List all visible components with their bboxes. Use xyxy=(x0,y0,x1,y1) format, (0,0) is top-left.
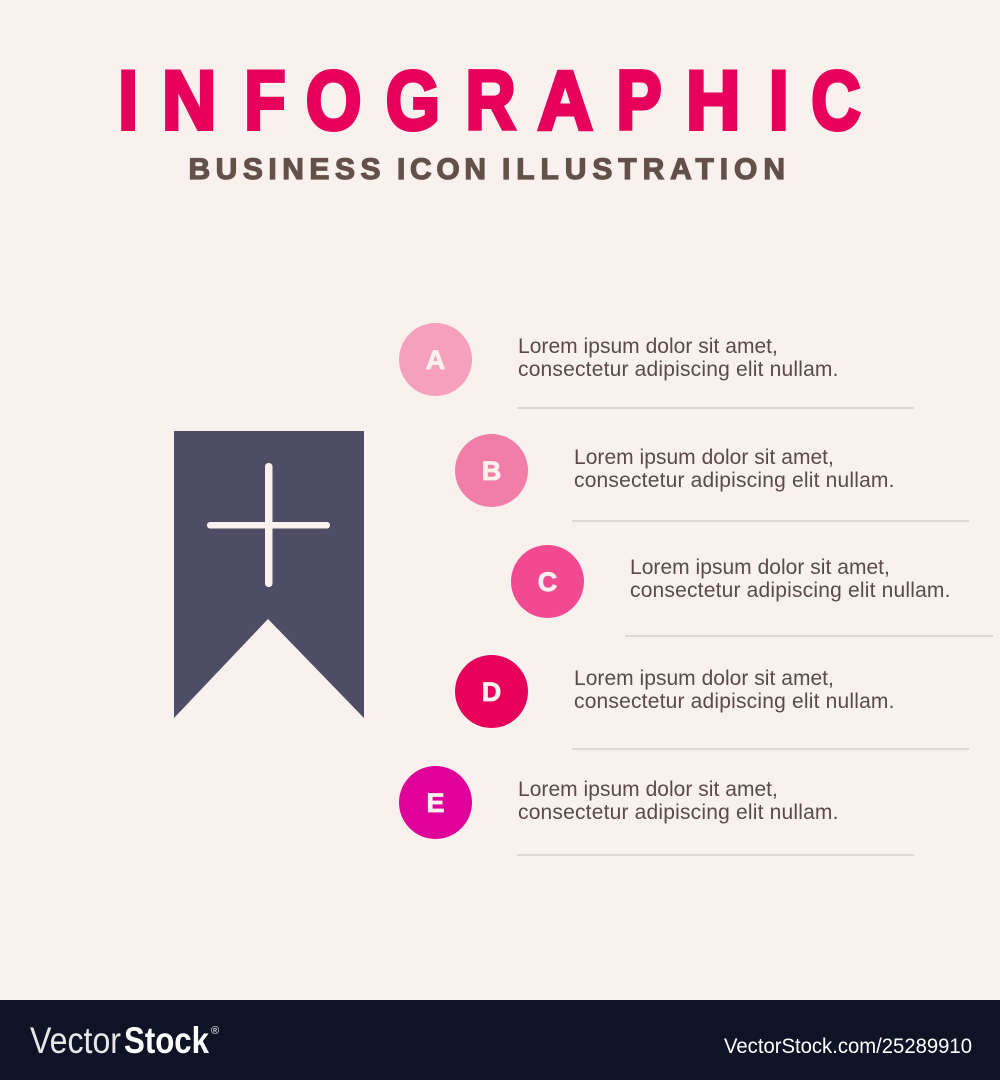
item E xyxy=(399,766,914,856)
footer logo: Stock xyxy=(124,1020,209,1061)
text B xyxy=(574,446,895,492)
subtitle: ICON xyxy=(397,153,486,186)
title: A xyxy=(538,53,593,147)
badge A: A xyxy=(426,345,445,375)
badge B: B xyxy=(482,456,501,486)
title: N xyxy=(162,53,216,147)
badge C xyxy=(511,545,584,618)
footer bar xyxy=(0,1000,1000,1080)
footer url: VectorStock.com/25289910 xyxy=(724,1035,972,1058)
subtitle xyxy=(188,153,785,186)
text D xyxy=(574,667,895,713)
text A xyxy=(518,335,839,381)
text E: Lorem ipsum dolor sit amet, xyxy=(518,778,778,801)
item C xyxy=(511,545,993,637)
badge B xyxy=(455,434,528,507)
title: R xyxy=(465,53,516,147)
text A: consectetur adipiscing elit nullam. xyxy=(518,358,839,381)
text B: Lorem ipsum dolor sit amet, xyxy=(574,446,834,469)
icon: bookmark with plus xyxy=(174,431,364,718)
title xyxy=(118,53,861,147)
text D: consectetur adipiscing elit nullam. xyxy=(574,690,895,713)
title: G xyxy=(386,53,440,147)
badge E: E xyxy=(426,788,444,818)
text E xyxy=(518,778,839,824)
footer logo xyxy=(30,1020,219,1061)
title: I xyxy=(118,53,138,147)
badge D xyxy=(455,655,528,728)
item B xyxy=(455,434,969,522)
title: I xyxy=(769,53,789,147)
text B: consectetur adipiscing elit nullam. xyxy=(574,469,895,492)
text C: Lorem ipsum dolor sit amet, xyxy=(630,556,890,579)
badge A xyxy=(399,323,472,396)
text A: Lorem ipsum dolor sit amet, xyxy=(518,335,778,358)
badge E xyxy=(399,766,472,839)
text E: consectetur adipiscing elit nullam. xyxy=(518,801,839,824)
text D: Lorem ipsum dolor sit amet, xyxy=(574,667,834,690)
subtitle: ILLUSTRATION xyxy=(502,153,785,186)
footer logo: ® xyxy=(211,1025,219,1037)
subtitle: BUSINESS xyxy=(188,153,380,186)
title: H xyxy=(686,53,740,147)
text C: consectetur adipiscing elit nullam. xyxy=(630,579,951,602)
text C xyxy=(630,556,951,602)
title: C xyxy=(811,53,861,147)
badge C: C xyxy=(538,567,557,597)
title: P xyxy=(616,53,662,147)
item D xyxy=(455,655,969,750)
title: O xyxy=(306,53,361,147)
title: F xyxy=(244,53,286,147)
item A xyxy=(399,323,914,409)
badge D: D xyxy=(482,677,501,707)
footer logo: Vector xyxy=(30,1020,121,1061)
